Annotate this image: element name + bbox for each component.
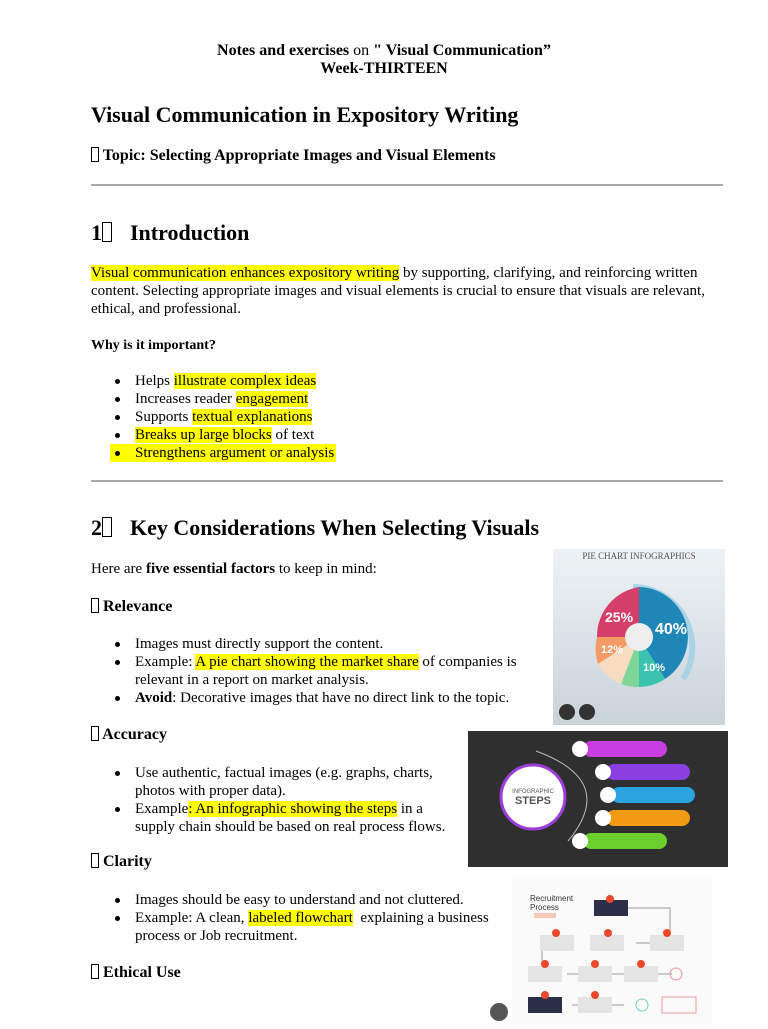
bullets: accuracy: [115, 765, 445, 835]
icon: image search button: [490, 1003, 508, 1021]
header: Week-THIRTEEN: [320, 60, 448, 77]
intro paragraph: ethical, and professional.: [91, 301, 241, 317]
header: Notes and exercises on " Visual Communication”: [217, 42, 551, 59]
bullets: clarity: Images should be easy to understand and not cluttered.: [135, 892, 464, 908]
heading: key considerations: 2 Key Considerations When Selecting Visuals: [91, 515, 539, 540]
image: pie chart infographic: 40%: [655, 621, 687, 638]
bullet list: importance: Breaks up large blocks of text: [135, 427, 314, 443]
heading: clarity: Clarity: [103, 853, 152, 870]
heading: introduction: 1 Introduction: [91, 220, 249, 245]
image: pie chart infographic: PIE CHART INFOGRAPHICS: [582, 551, 696, 561]
bullet list: importance: Supports textual explanations: [135, 409, 312, 425]
intro paragraph: Visual communication enhances expository writing by supporting, clarifying, and reinforcing written: [91, 265, 697, 281]
bullets: clarity: [115, 892, 489, 944]
heading: accuracy: Accuracy: [102, 726, 167, 743]
bullets: accuracy: photos with proper data).: [135, 783, 286, 799]
bullets: relevance: relevant in a report on market analysis.: [135, 672, 369, 688]
bullets: accuracy: Use authentic, factual images (e.g. graphs, charts,: [135, 765, 433, 781]
bullets: clarity: process or Job recruitment.: [135, 928, 297, 944]
heading: relevance: Relevance: [103, 598, 172, 615]
intro paragraph: [91, 265, 705, 317]
bullet list: importance: Helps illustrate complex ideas: [135, 373, 316, 389]
bullets: accuracy: supply chain should be based on real process flows.: [135, 819, 445, 835]
bullet list: importance: Strengthens argument or analysis: [135, 445, 334, 461]
subheading: why important: Why is it important?: [91, 338, 216, 353]
title: Visual Communication in Expository Writing: [91, 102, 518, 127]
bullet list: importance: [110, 373, 336, 462]
bullets: accuracy: Example: An infographic showing the steps in a: [135, 801, 423, 817]
intro line: Here are five essential factors to keep in mind:: [91, 561, 377, 577]
topic heading: Topic: Selecting Appropriate Images and Visual Elements: [103, 147, 496, 164]
image: recruitment flowchart: [512, 875, 712, 1024]
bullets: clarity: Example: A clean, labeled flowchart explaining a business: [135, 910, 489, 926]
bullets: relevance: Avoid: Decorative images that have no direct link to the topic.: [135, 690, 509, 706]
bullets: relevance: Example: A pie chart showing the market share of companies is: [135, 654, 517, 670]
image: pie chart infographic: 25%: [605, 609, 634, 625]
bullet list: importance: Increases reader engagement: [135, 391, 308, 407]
image: recruitment flowchart: Process: [530, 903, 559, 912]
image: pie chart infographic: 12%: [601, 644, 623, 656]
heading: ethical use: Ethical Use: [103, 964, 181, 981]
bullets: relevance: Images must directly support the content.: [135, 636, 383, 652]
image: recruitment flowchart: Recruitment: [530, 894, 574, 903]
image: infographic steps: STEPS: [515, 795, 551, 807]
image: infographic steps: INFOGRAPHIC: [512, 789, 554, 795]
image: pie chart infographic: [553, 549, 725, 725]
intro paragraph: content. Selecting appropriate images and visual elements is crucial to ensure that visuals are relevant,: [91, 283, 705, 299]
image: pie chart infographic: 10%: [643, 662, 665, 674]
image: infographic steps: [468, 731, 728, 867]
header: [217, 42, 551, 77]
bullets: relevance: [115, 636, 517, 706]
